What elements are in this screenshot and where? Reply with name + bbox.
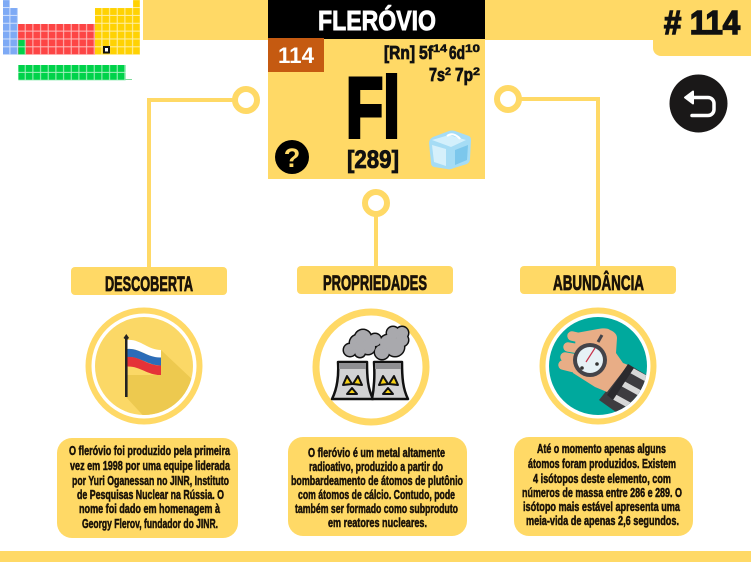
text block: abundancia: meia-vida de apenas 2,6 segundos.	[526, 514, 679, 528]
top bar left	[143, 0, 268, 40]
electron configuration: 7p	[455, 65, 473, 85]
atomic number	[268, 38, 324, 72]
text block: propriedades: com átomos de cálcio. Contudo, pode	[298, 488, 455, 502]
mini periodic table	[0, 0, 141, 81]
electron configuration: 2	[445, 66, 451, 78]
icon: ice cube	[429, 130, 471, 169]
text block: propriedades: O fleróvio é um metal altamente	[308, 446, 445, 460]
text block: descoberta: Georgy Flerov, fundador do JINR.	[82, 517, 218, 531]
electron configuration: 7s	[429, 65, 445, 85]
text block: propriedades: radioativo, produzido a partir do	[309, 460, 443, 474]
text block: propriedades: em reatores nucleares.	[328, 516, 427, 530]
heading: propriedades: PROPRIEDADES	[323, 272, 427, 295]
text block: propriedades: também ser formado como subproduto	[295, 502, 458, 516]
text block: descoberta	[57, 438, 238, 538]
electron configuration: 10	[465, 43, 480, 55]
electron configuration: 2	[473, 66, 480, 78]
text block: descoberta: nome foi dado em homenagem à	[79, 502, 220, 516]
icon: nuclear plant	[316, 312, 426, 422]
title	[268, 0, 485, 39]
heading: abundancia: ABUNDÂNCIA	[553, 271, 644, 295]
connector: descoberta	[149, 89, 257, 268]
element symbol: Fl	[346, 61, 400, 156]
electron configuration	[384, 43, 480, 85]
icon: unknown category: ?	[284, 143, 300, 173]
panel: propriedades	[288, 266, 467, 536]
atomic number: 114	[278, 43, 315, 68]
heading: propriedades	[297, 266, 453, 295]
text block: abundancia: 4 isótopos deste elemento, com	[533, 472, 671, 486]
text block: descoberta: O fleróvio foi produzido pela primeira	[69, 444, 231, 458]
panel: abundancia	[514, 266, 693, 536]
bottom bar	[0, 551, 751, 562]
electron configuration: 6d	[449, 43, 465, 63]
text block: abundancia: Até o momento apenas alguns	[537, 442, 666, 456]
electron configuration: [Rn]	[384, 43, 415, 63]
title: FLERÓVIO	[318, 5, 436, 36]
icon: hand with stopwatch	[540, 308, 658, 424]
text block: abundancia	[514, 437, 693, 536]
connector: abundancia	[497, 88, 598, 267]
text block: propriedades: bombardeamento de átomos de plutônio	[291, 474, 463, 488]
icon: back button	[670, 74, 728, 132]
element card	[268, 0, 485, 179]
text block: descoberta: por Yuri Oganessan no JINR, Instituto	[72, 474, 229, 488]
icon: unknown category	[275, 140, 309, 174]
element number tab	[653, 0, 751, 56]
text block: abundancia: isótopo mais estável apresenta uma	[523, 500, 681, 514]
connector: propriedades	[365, 192, 387, 267]
text block: descoberta: de Pesquisas Nuclear na Rússia. O	[77, 488, 224, 502]
heading: abundancia	[520, 266, 676, 295]
atomic mass: [289]	[347, 146, 399, 174]
electron configuration: 14	[433, 43, 448, 55]
top bar right	[485, 0, 655, 40]
text block: descoberta: vez em 1998 por uma equipe liderada	[70, 459, 231, 473]
text block: abundancia: átomos foram produzidos. Existem	[528, 457, 676, 471]
element number tab: # 114	[664, 4, 741, 41]
heading: descoberta	[71, 267, 227, 296]
text block: abundancia: números de massa entre 286 e 289. O	[522, 486, 682, 500]
text block: propriedades	[288, 437, 467, 536]
icon: russian flag	[86, 308, 202, 424]
heading: descoberta: DESCOBERTA	[105, 273, 193, 296]
electron configuration: 5f	[419, 43, 434, 63]
panel: descoberta	[57, 267, 238, 538]
